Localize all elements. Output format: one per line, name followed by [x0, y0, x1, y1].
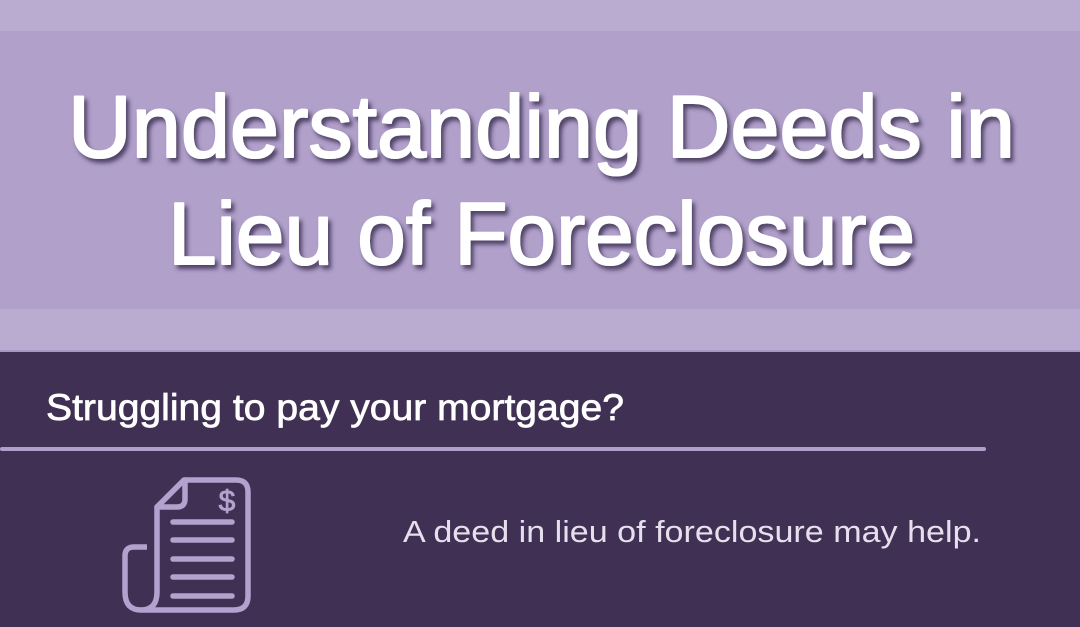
header band — [0, 0, 1080, 352]
title — [68, 77, 1015, 283]
dark panel — [0, 352, 1080, 627]
body text: A deed in lieu of foreclosure may help. — [403, 514, 981, 549]
icon: dollar sign: $ — [219, 485, 236, 518]
title: Understanding Deeds in — [68, 77, 1015, 176]
divider — [0, 447, 986, 451]
title: Lieu of Foreclosure — [168, 184, 915, 283]
icon: bill document — [125, 480, 248, 610]
subheading: Struggling to pay your mortgage? — [46, 387, 624, 428]
